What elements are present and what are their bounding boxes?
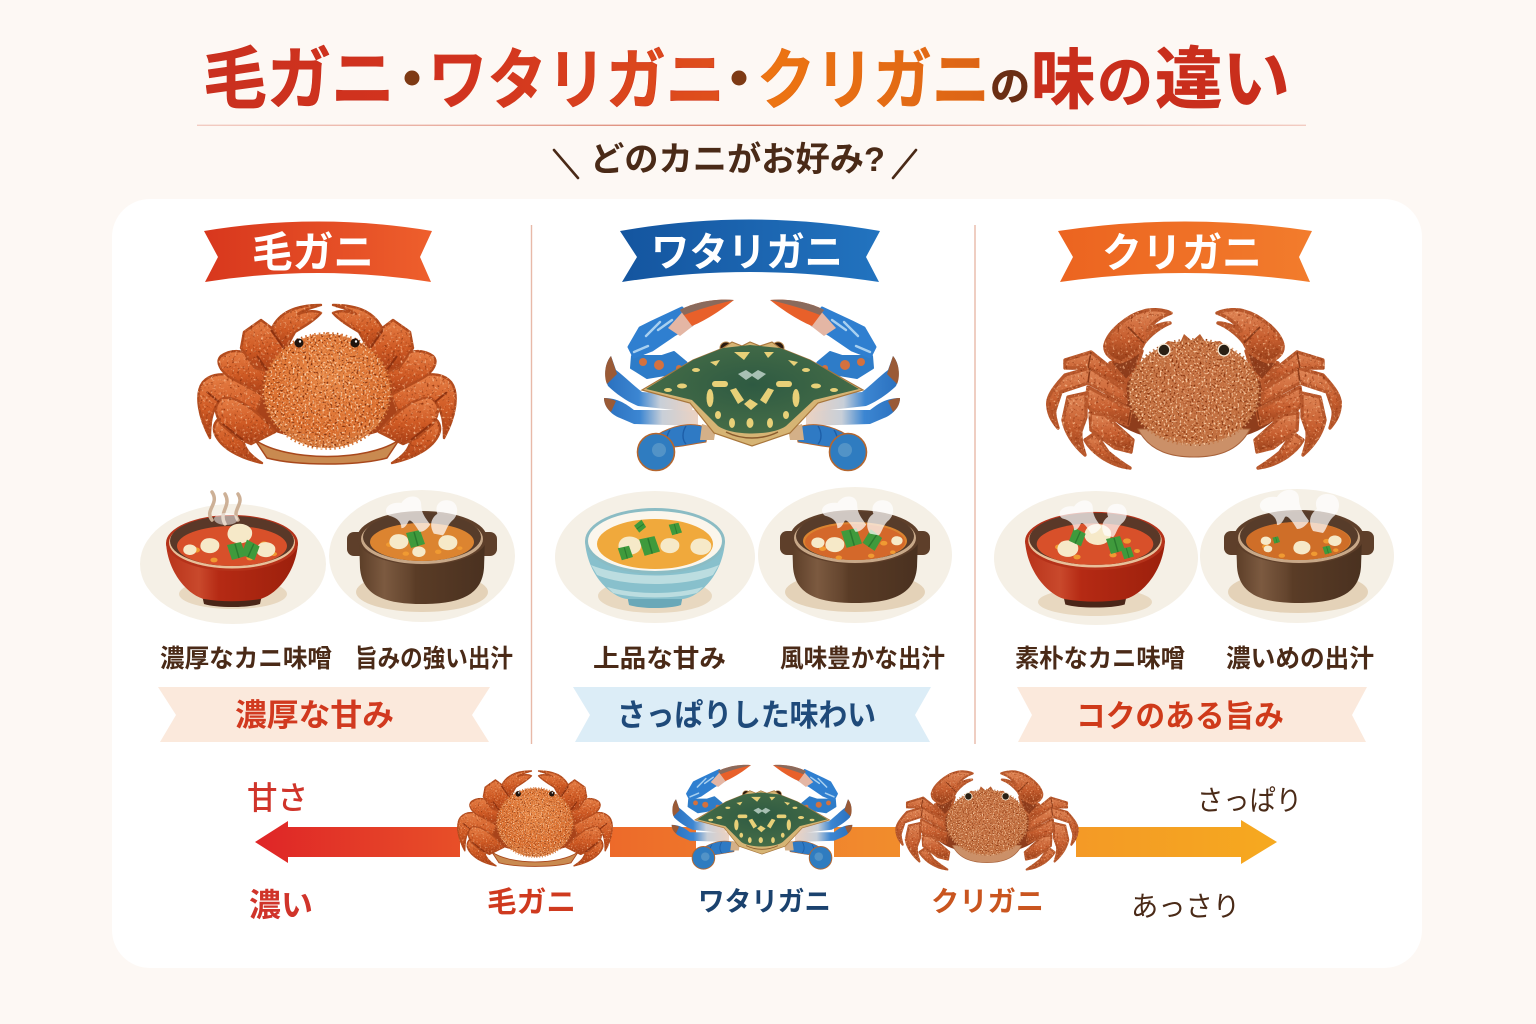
dish: 濃いめの出汁 <box>1200 489 1394 623</box>
ribbon: コクのある旨み: コクのある旨み <box>1076 699 1284 734</box>
label: さっぱり: さっぱり <box>1197 785 1302 816</box>
label: 濃い: 濃い <box>249 887 313 923</box>
dish: 旨みの強い出汁 <box>329 490 515 622</box>
title <box>203 42 1290 118</box>
dish: 風味豊かな出汁 <box>758 487 952 623</box>
ribbon: 濃厚な甘み: 濃厚な甘み <box>235 698 394 733</box>
crab: ワタリガニ <box>604 300 900 470</box>
panel: ワタリガニ <box>555 220 952 742</box>
banner: クリガニ: クリガニ <box>1102 230 1262 276</box>
crab: 毛ガニ <box>198 305 456 464</box>
label: 甘さ: 甘さ <box>247 780 308 816</box>
panel: クリガニ <box>994 222 1394 742</box>
banner: ワタリガニ: ワタリガニ <box>651 231 843 275</box>
dish: 素朴なカニ味噌 <box>994 491 1198 625</box>
subtitle: どのカニがお好み? <box>590 140 885 179</box>
title: 違い <box>1155 42 1290 118</box>
label: あっさり: あっさり <box>1131 891 1240 922</box>
ribbon: コクのある旨み <box>1017 687 1367 742</box>
title: 毛ガニ <box>203 42 395 118</box>
arrow <box>255 820 1277 864</box>
label: 上品な甘み: 上品な甘み <box>593 645 726 673</box>
banner: クリガニ <box>1058 222 1312 282</box>
dish: 上品な甘み <box>555 491 755 623</box>
title: 味 <box>1031 43 1095 117</box>
label: 毛ガニ: 毛ガニ <box>487 886 576 919</box>
label: 旨みの強い出汁: 旨みの強い出汁 <box>355 645 513 673</box>
label: 風味豊かな出汁: 風味豊かな出汁 <box>780 645 945 673</box>
label: ワタリガニ: ワタリガニ <box>698 887 831 917</box>
ribbon: 濃厚な甘み <box>158 687 490 742</box>
banner: 毛ガニ: 毛ガニ <box>252 229 374 276</box>
ribbon: さっぱりした味わい <box>573 687 931 742</box>
crab: クリガニ <box>1048 310 1340 468</box>
label: 素朴なカニ味噌: 素朴なカニ味噌 <box>1015 645 1185 673</box>
taste scale <box>247 765 1302 923</box>
ribbon: さっぱりした味わい: さっぱりした味わい <box>617 698 876 733</box>
scale crab: クリガニ <box>896 771 1078 870</box>
title: ワタリガニ <box>428 43 725 117</box>
main white panel <box>112 199 1422 968</box>
panel: 毛ガニ <box>140 222 515 742</box>
banner: ワタリガニ <box>620 220 880 282</box>
label: 濃いめの出汁: 濃いめの出汁 <box>1226 645 1374 673</box>
scale crab: 毛ガニ <box>458 771 612 866</box>
banner: 毛ガニ <box>204 222 432 282</box>
scale crab: ワタリガニ <box>672 765 852 869</box>
label: クリガニ: クリガニ <box>931 886 1044 917</box>
title: クリガニ <box>757 43 990 117</box>
label: 濃厚なカニ味噌: 濃厚なカニ味噌 <box>160 645 332 673</box>
title: の <box>990 65 1030 109</box>
dish: 濃厚なカニ味噌 <box>140 492 326 624</box>
title: の <box>1097 51 1153 114</box>
